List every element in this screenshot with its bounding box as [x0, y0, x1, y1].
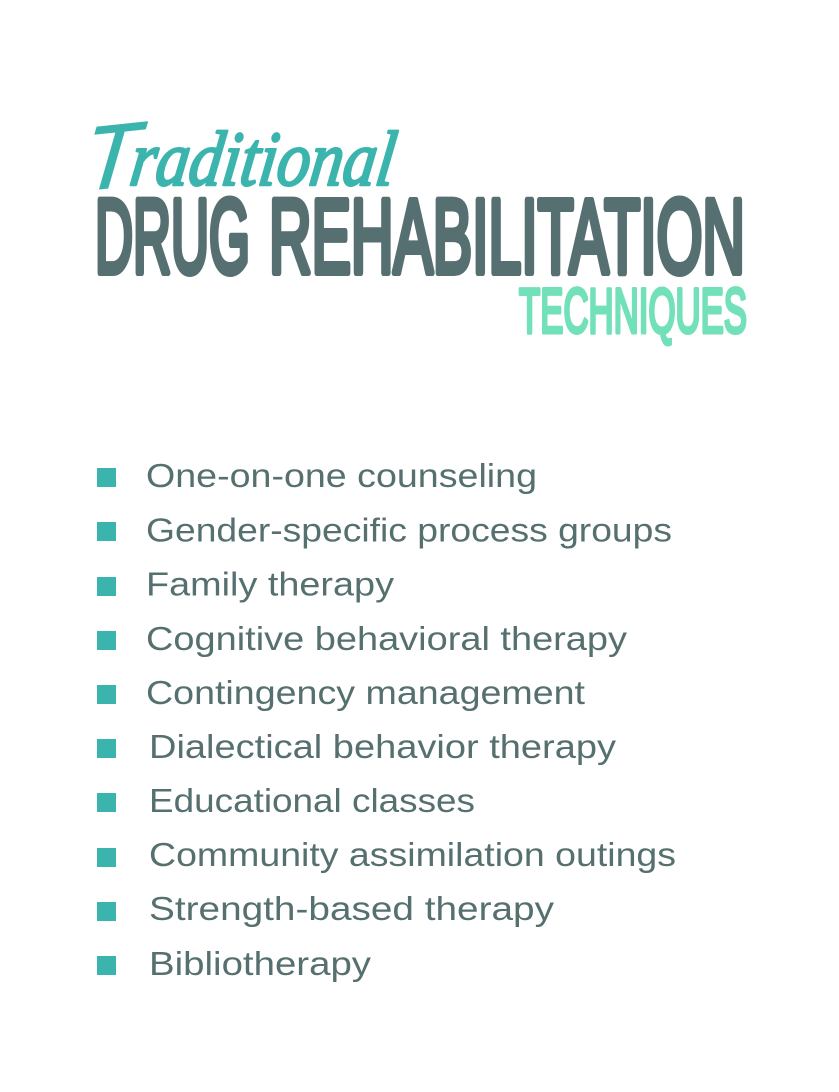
list item: Gender-specific process groups: Gender-specific process groups: [146, 512, 672, 550]
title script line: Traditional: [79, 103, 402, 211]
list item: Cognitive behavioral therapy: Cognitive behavioral therapy: [146, 621, 627, 658]
list item: Contingency management: Contingency management: [146, 675, 586, 712]
title main line: Drug Rehabilitation: DRUG: [95, 178, 250, 296]
list item: Educational classes: Educational classes: [149, 783, 475, 820]
list item: One-on-one counseling: One-on-one counseling: [146, 458, 537, 495]
title main line: Drug Rehabilitation: [95, 178, 745, 296]
list of techniques: [97, 458, 676, 983]
list item: Dialectical behavior therapy: Dialectical behavior therapy: [149, 729, 616, 766]
title script line: Traditional: T: [79, 103, 150, 211]
list item: Community assimilation outings: Community assimilation outings: [149, 837, 676, 874]
title script line: Traditional: raditional: [126, 115, 402, 202]
title: [79, 103, 747, 346]
list item: Family therapy: Family therapy: [146, 566, 394, 604]
list item: Bibliotherapy: Bibliotherapy: [149, 946, 371, 983]
list item: Strength-based therapy: Strength-based therapy: [149, 891, 554, 928]
